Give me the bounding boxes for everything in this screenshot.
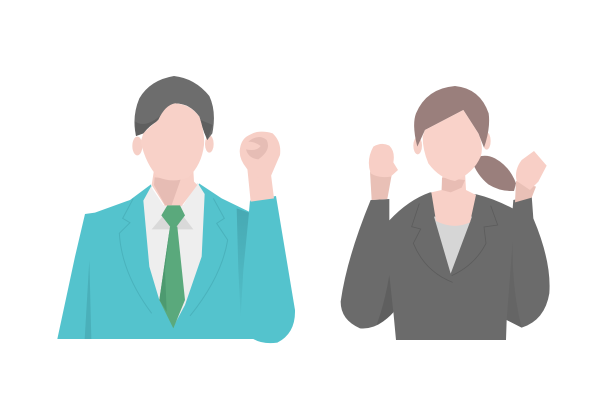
woman lapels [412,203,498,282]
woman inner shirt [434,217,472,274]
tie blade [159,227,185,328]
man fist shadow [246,137,268,159]
woman neck and chest [431,172,476,226]
woman neck shadow [442,178,465,192]
man hair shadow [135,116,213,140]
man fist [240,132,280,178]
woman jacket shadows [377,242,522,328]
man hair [134,76,214,140]
woman ears [413,132,491,154]
man shirt [143,183,205,327]
man jacket [57,183,295,343]
man jacket shadows [85,208,249,339]
left fist [369,144,398,177]
man ears [132,135,214,155]
woman right forearm and fist [515,151,547,202]
tie knot [161,205,185,227]
figure: man in teal suit [57,76,295,343]
man neck front [152,170,197,206]
woman hair [414,86,489,148]
man forearm [247,167,274,202]
woman left forearm and fist [369,144,398,200]
right forearm [515,181,536,202]
man neck shadow [154,177,181,205]
man tie [159,205,185,328]
right fist [516,151,547,190]
figure: woman in grey suit [341,86,550,340]
man lapels [119,198,228,316]
man face [141,103,204,180]
woman ponytail [472,156,516,191]
man collar [152,215,193,229]
left forearm [370,172,392,200]
woman jacket [341,192,550,340]
woman face [423,110,482,181]
